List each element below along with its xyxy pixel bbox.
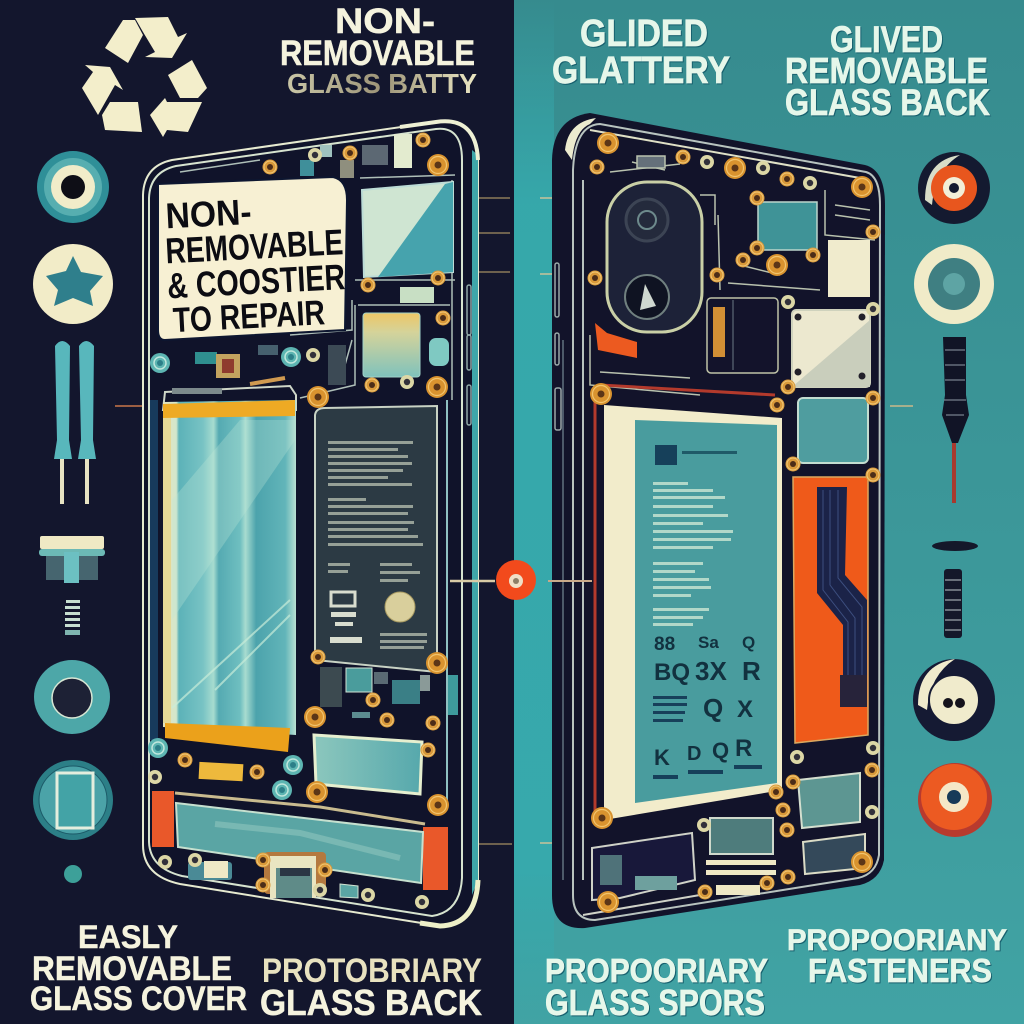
top module strip	[180, 160, 455, 400]
caption: bottom right: PROPOORIANY	[787, 924, 1007, 957]
dark battery panel	[315, 406, 437, 672]
icon: connector clip	[39, 536, 105, 583]
heading: top left label: NON-	[335, 2, 435, 41]
left yellow edge	[163, 418, 171, 723]
lower circuit block	[320, 667, 458, 718]
caption: bottom left: GLASS COVER	[30, 980, 247, 1018]
caption: bottom left: REMOVABLE	[32, 950, 232, 988]
cream panel lower	[792, 310, 870, 387]
dark inner compartment	[707, 298, 778, 373]
icon: flat disc	[932, 541, 978, 551]
battery symbols: R	[735, 735, 752, 762]
callout: non-removable: TO REPAIR	[172, 293, 326, 340]
callout: non-removable	[158, 177, 348, 340]
orange camera accent	[595, 323, 637, 358]
battery symbols: 3X	[695, 656, 727, 686]
screws: right phone	[588, 132, 880, 913]
left tool icons column	[33, 151, 113, 883]
small caption rects	[653, 765, 762, 779]
inner frame	[149, 129, 462, 916]
red battery trim	[595, 385, 775, 820]
heading: top middle-right label: GLIDED	[580, 13, 708, 55]
blue side rail	[150, 400, 158, 740]
yellow top strip	[163, 400, 295, 418]
battery symbols: Q	[742, 633, 755, 652]
battery symbols: K	[654, 745, 670, 770]
top circuitry	[590, 156, 875, 395]
battery marking icon	[330, 592, 362, 643]
background: teal right half	[514, 0, 1024, 1024]
background: dark left half	[0, 0, 514, 1024]
heading: top right label: REMOVABLE	[785, 50, 988, 91]
caption: bottom left	[30, 919, 247, 1018]
teal side band	[472, 150, 478, 895]
caption: bottom centre-left	[260, 952, 482, 1023]
battery symbols: Sa	[698, 633, 719, 652]
mid right glass panel	[363, 313, 420, 377]
yellow bottom strip	[165, 723, 290, 752]
bar under glass panel	[175, 793, 425, 824]
icon: device screen	[33, 760, 113, 840]
caption: bottom centre-right: GLASS SPORS	[545, 982, 765, 1023]
phone shell	[552, 113, 885, 928]
bottom modules	[583, 773, 865, 915]
callout: non-removable: & COOSTIER	[166, 256, 346, 306]
caption: bottom centre-left: PROTOBRIARY	[262, 952, 482, 990]
circuit traces under callout	[163, 145, 388, 410]
caption: bottom right	[787, 924, 1007, 989]
centre orange badge	[496, 560, 536, 600]
icon: spring	[65, 600, 80, 635]
rear camera module	[607, 182, 702, 332]
heading: top left label	[280, 2, 477, 99]
caption: bottom centre-right: PROPOORIARY	[545, 952, 768, 989]
icon: black cream disc	[913, 659, 995, 741]
charging connector	[264, 852, 326, 898]
side buttons	[467, 285, 471, 425]
heading: top right label: GLIVED	[830, 19, 943, 60]
left phone	[143, 121, 478, 926]
icon: recycling symbol	[82, 17, 207, 137]
yellow tab	[199, 762, 243, 781]
lower right glass panel	[314, 735, 422, 794]
heading: top middle-right label: GLATTERY	[552, 50, 730, 92]
battery symbols: X	[737, 696, 753, 723]
battery seal	[385, 592, 415, 622]
right orange block	[423, 827, 448, 890]
battery text lines	[653, 451, 737, 722]
teal panel right	[798, 398, 868, 463]
caption: bottom right: FASTENERS	[808, 952, 992, 989]
heading: top right label: GLASS BACK	[785, 82, 990, 123]
battery symbols: BQ	[654, 659, 690, 686]
heading: top right label	[785, 19, 990, 123]
battery symbols: D	[687, 743, 701, 765]
side buttons	[555, 263, 561, 430]
thick bottom-right corner	[420, 880, 478, 926]
heading: top left label: REMOVABLE	[280, 34, 475, 73]
bottom right module	[340, 884, 358, 898]
teal lock detail	[429, 338, 449, 366]
lower lens	[625, 275, 669, 319]
battery symbols: Q	[712, 738, 729, 763]
icon: teal ring screw	[37, 151, 109, 223]
phone shell	[143, 121, 478, 926]
icon: screwdrivers	[54, 341, 96, 504]
battery symbols: R	[742, 656, 761, 686]
icon: star bit head	[33, 244, 113, 324]
left orange block	[152, 791, 174, 847]
small cream tile	[400, 287, 434, 303]
bottom wide glass panel	[176, 803, 423, 883]
battery text lines	[328, 441, 427, 649]
right fastener icons column	[913, 152, 995, 837]
upper lens	[626, 199, 668, 241]
heading: top middle-right label	[552, 13, 730, 92]
battery qr mark	[655, 445, 677, 465]
centre connector line right	[548, 580, 592, 582]
orange flex cable board	[793, 477, 868, 743]
dark ribbon cable	[817, 487, 867, 705]
callout: non-removable: NON-	[165, 191, 253, 236]
background: bright teal band	[514, 0, 554, 1024]
battery symbols: 88	[654, 634, 675, 655]
icon: orange disc	[918, 763, 992, 837]
bottom left module	[188, 861, 232, 880]
icon: long black screw	[942, 337, 969, 503]
large battery panel	[604, 405, 782, 820]
battery symbols: Q	[703, 693, 723, 723]
icon: cream disc	[914, 244, 994, 324]
caption: bottom centre-right	[545, 952, 768, 1023]
inner frame lines	[563, 124, 880, 920]
caption: bottom centre-left: GLASS BACK	[260, 982, 482, 1023]
cream panel upper	[828, 240, 870, 297]
connector lines: left phone to centre	[115, 198, 913, 844]
icon: orange dark ring	[918, 152, 990, 224]
thick top-right corner	[400, 121, 478, 160]
screws: left phone	[148, 132, 450, 909]
caption: bottom left: EASLY	[78, 919, 178, 955]
small white module	[394, 134, 412, 168]
battery symbols	[654, 633, 761, 770]
highlight at top corner	[565, 118, 596, 160]
callout: non-removable: REMOVABLE	[164, 221, 344, 271]
right phone	[552, 113, 885, 928]
left glass panel	[163, 400, 296, 752]
top right glass panel	[362, 182, 453, 277]
diagonal reflections	[172, 420, 295, 620]
centre connector line left	[450, 580, 495, 582]
top teal panel	[758, 202, 817, 250]
side line	[446, 400, 448, 800]
heading: top left label: GLASS BATTY	[287, 68, 477, 99]
icon: teal washer	[34, 660, 110, 734]
icon: short screw	[944, 569, 962, 638]
icon: tiny screw	[64, 865, 82, 883]
